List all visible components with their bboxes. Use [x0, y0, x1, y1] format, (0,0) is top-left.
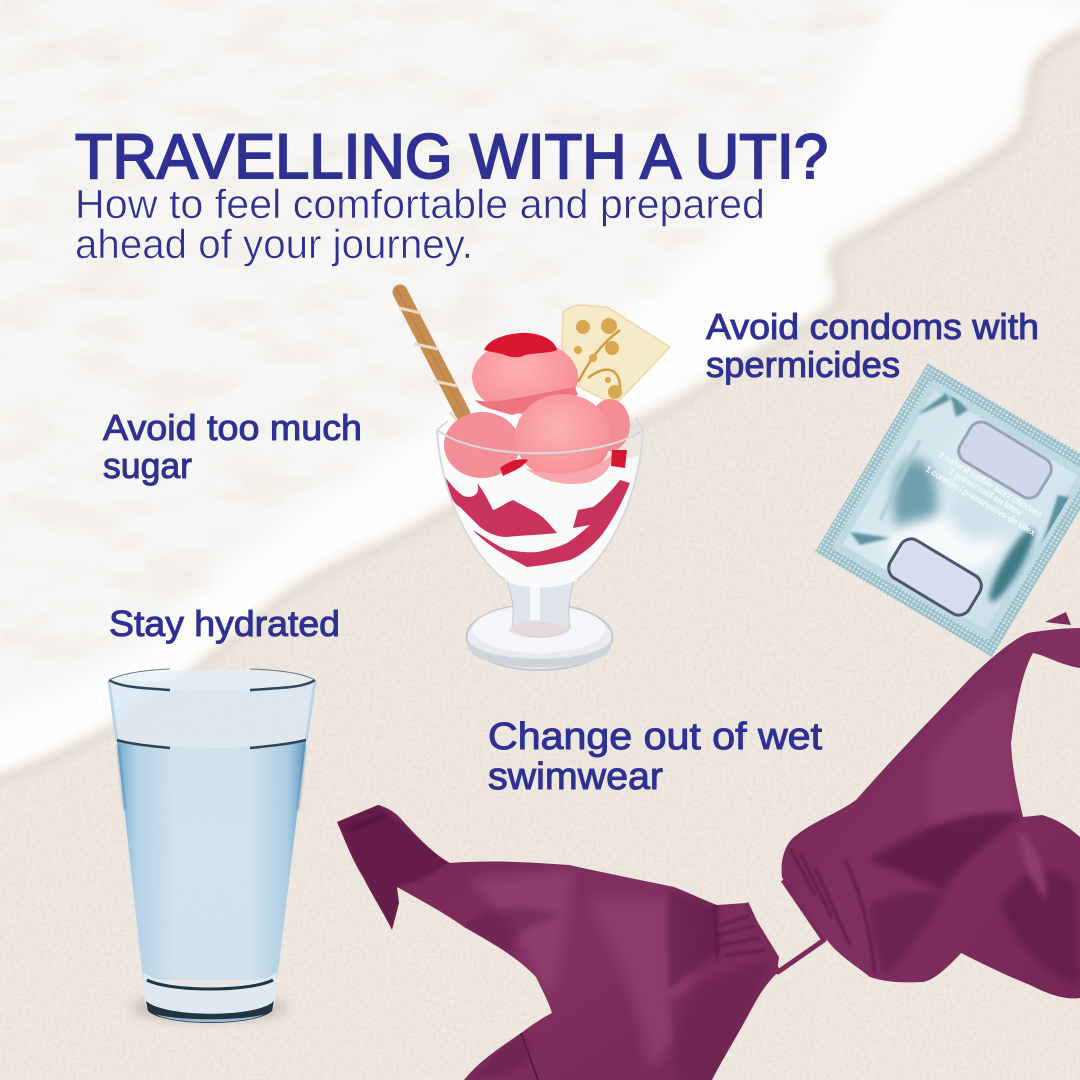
icon: glass of water: [109, 669, 315, 1023]
glass rim: [109, 670, 315, 690]
label: avoid sugar: [103, 407, 362, 486]
shadow: [131, 995, 287, 1021]
icon: ice cream sundae: [396, 288, 670, 670]
background: sea foam: [0, 0, 1080, 783]
label: avoid condoms: spermicides: [706, 344, 900, 385]
label: avoid condoms: [706, 306, 1039, 385]
connector ring: [746, 880, 824, 972]
biscuit: [562, 305, 670, 405]
raspberry swirl: [445, 477, 630, 567]
title: TRAVELLING WITH A UTI?: [75, 122, 828, 192]
label: avoid sugar: sugar: [103, 445, 192, 486]
glass foot: [466, 604, 612, 670]
right cup: [775, 612, 1080, 1005]
subtitle: ahead of your journey.: [75, 221, 473, 267]
glass body: [109, 681, 315, 1005]
label: avoid condoms: Avoid condoms with: [706, 306, 1039, 347]
syrup: [484, 333, 627, 476]
left cup: [330, 800, 790, 1080]
icon: bikini top: [330, 612, 1080, 1080]
bowl of cream: [440, 455, 640, 588]
glass base: [143, 972, 277, 1022]
wafer stick: [396, 288, 466, 420]
icon: condom packet: [815, 363, 1080, 657]
label: stay hydrated: Stay hydrated: [109, 603, 340, 644]
label: change swimwear: swimwear: [488, 756, 663, 798]
label: change swimwear: [488, 716, 822, 798]
capsule upper: [954, 417, 1056, 503]
capsule lower: [884, 534, 986, 620]
subtitle: How to feel comfortable and prepared: [75, 181, 765, 227]
packet print: 1 préservatif en latex: [947, 466, 1024, 518]
glass stem: [506, 578, 575, 638]
label: change swimwear: Change out of wet: [488, 716, 822, 758]
water: [117, 741, 306, 980]
scoops: [444, 340, 630, 484]
packet print: 1 natural rubber latex condom: [937, 450, 1044, 519]
packet print: 1 condón / preservativo de látex: [924, 464, 1038, 538]
subtitle: [75, 181, 765, 267]
glass rim: [437, 418, 643, 580]
label: avoid sugar: Avoid too much: [103, 407, 362, 448]
